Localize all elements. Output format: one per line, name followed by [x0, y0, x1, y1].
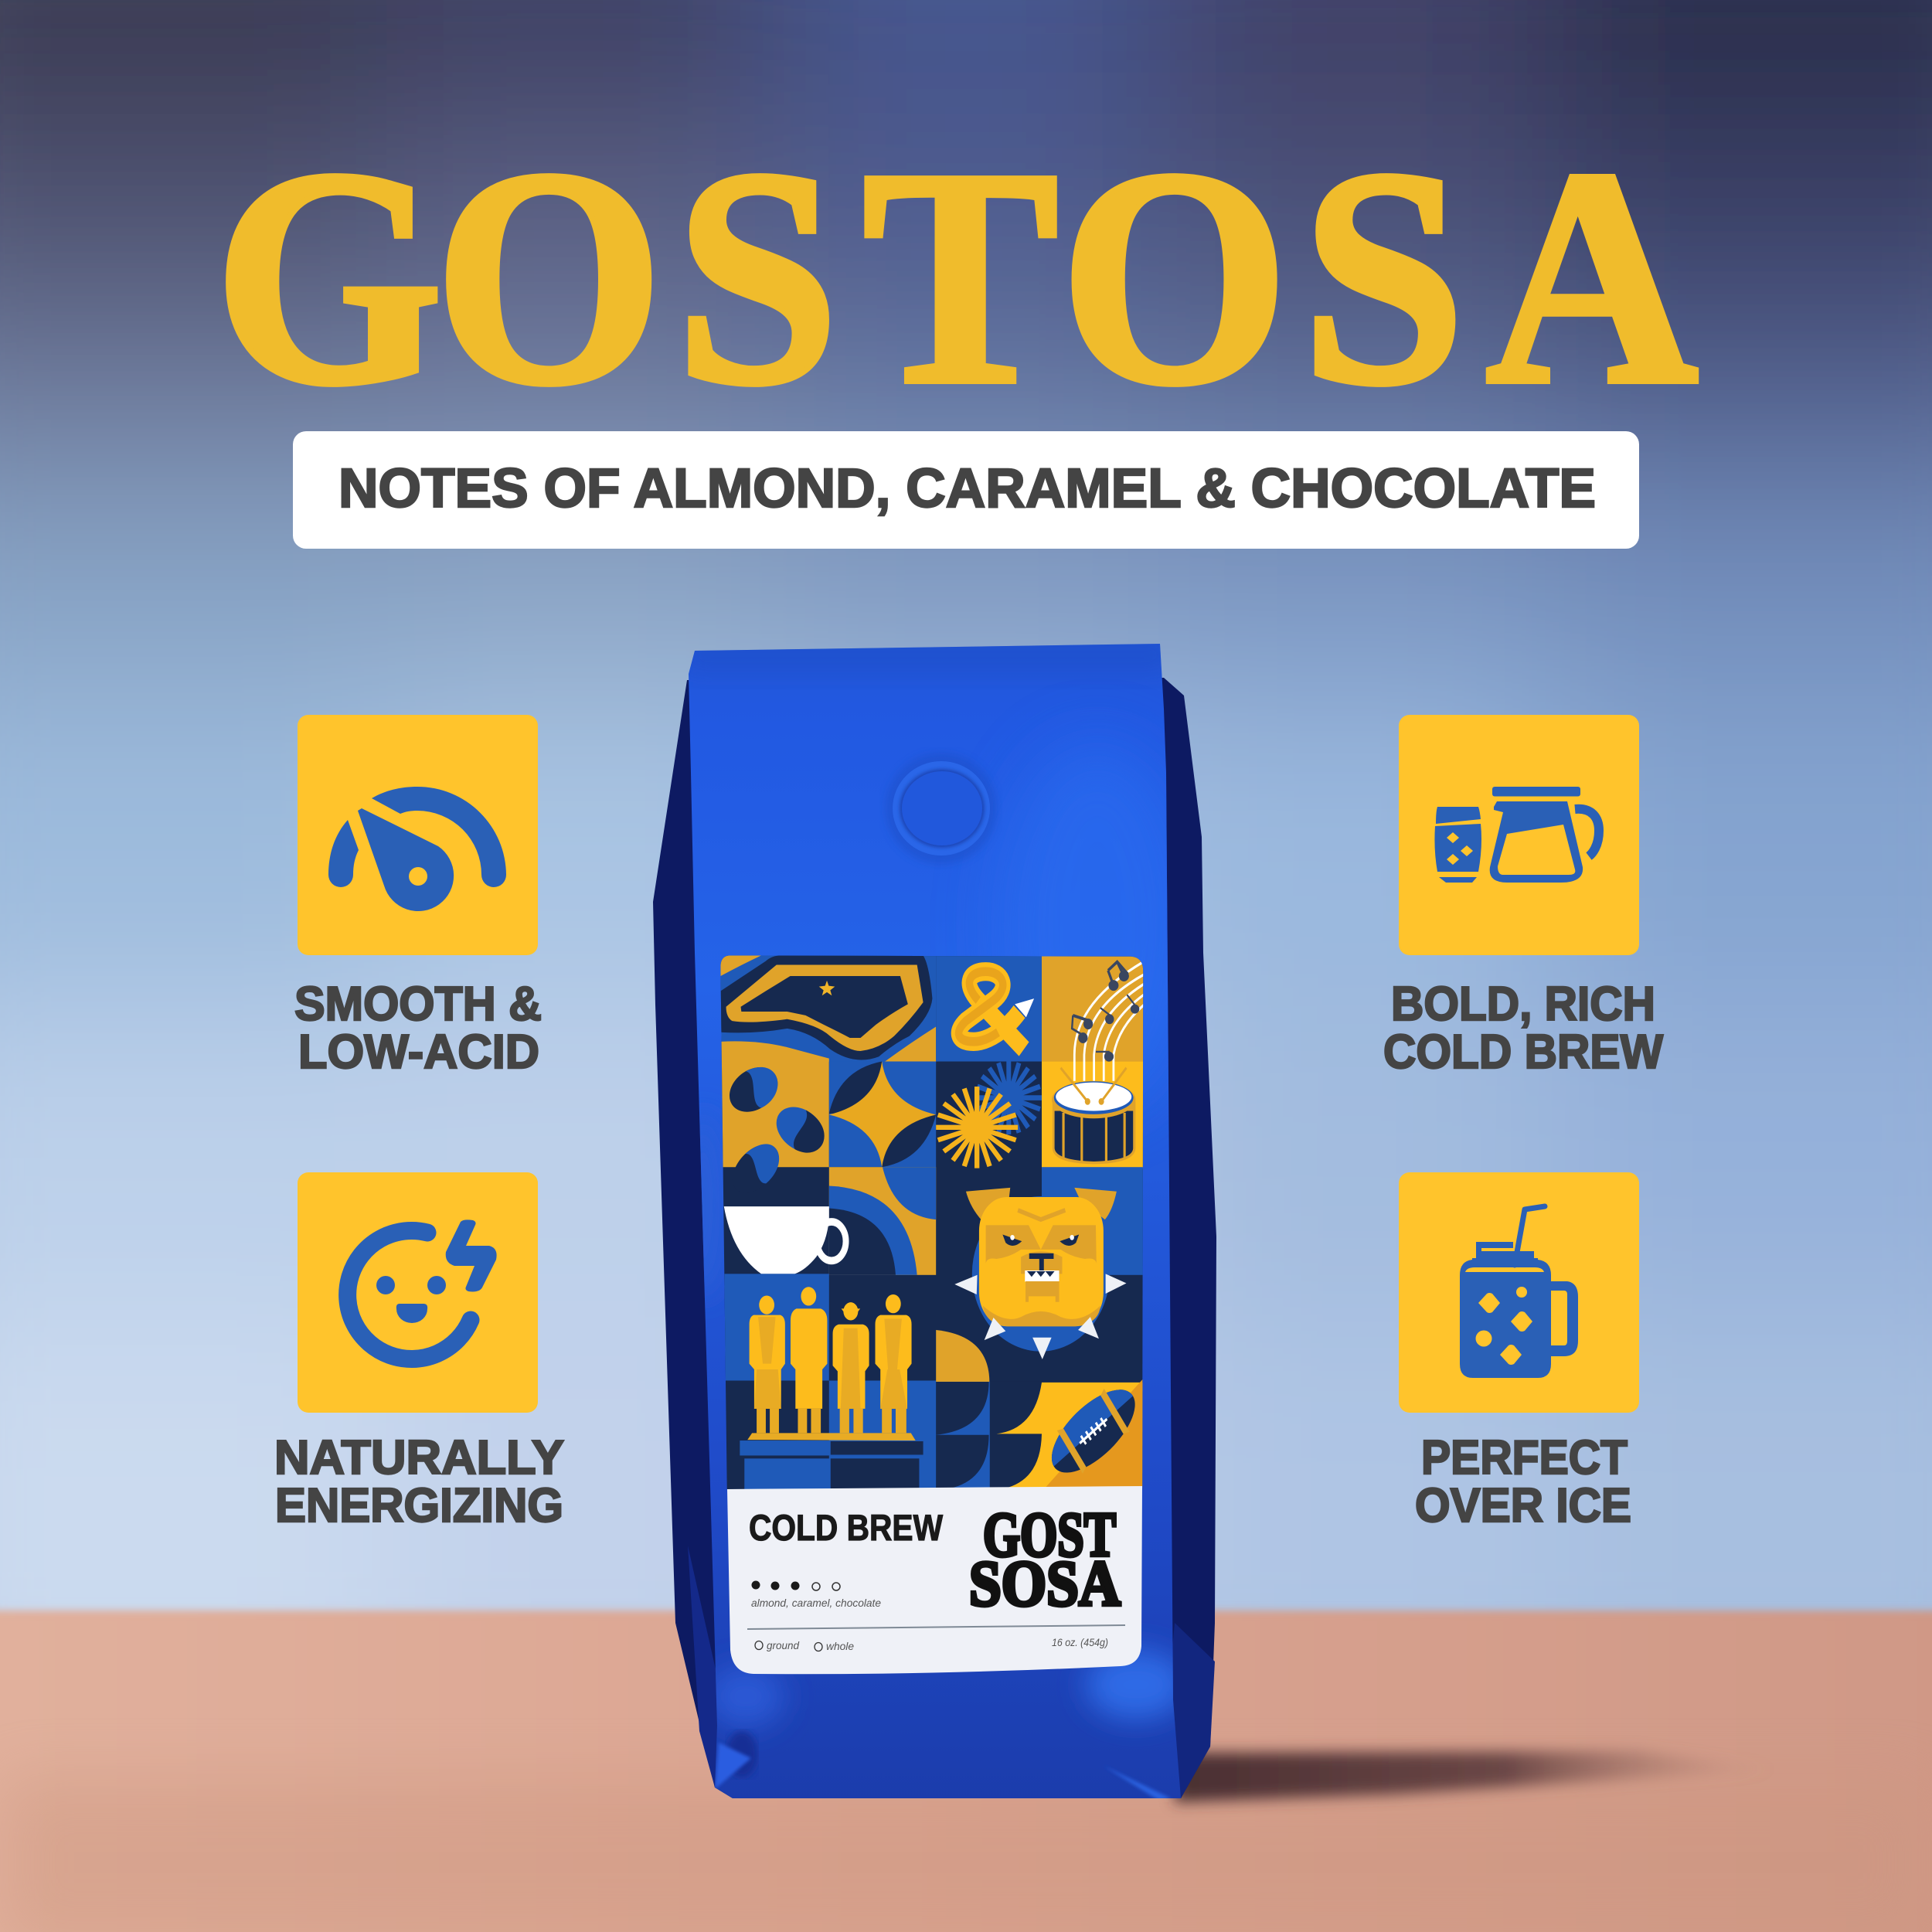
feature: smooth and low-acid [294, 715, 542, 1079]
icon: gauge [328, 787, 506, 911]
label: BOLD, RICH [1391, 978, 1655, 1031]
art: blue right tile [1042, 1167, 1143, 1275]
icon: glass and carafe [1434, 787, 1599, 883]
net weight: 16 oz. (454g) [1052, 1637, 1108, 1648]
art: coffee cup [724, 1206, 846, 1274]
product name: COLD BREW [749, 1507, 944, 1548]
grind options: whole [826, 1641, 854, 1652]
art: pompom tile [936, 1061, 1042, 1168]
brand logo [969, 1499, 1121, 1620]
flavour notes: almond, caramel, chocolate [751, 1597, 881, 1609]
art: music staff and snare drum [1042, 955, 1145, 1168]
label [1383, 978, 1663, 1079]
title: GOSTOSA [214, 106, 1698, 448]
feature: bold rich cold brew [1383, 715, 1663, 1079]
label: NATURALLY [274, 1431, 564, 1485]
tasting notes banner [293, 431, 1639, 549]
label art: mosaic illustration [717, 950, 1148, 1493]
wooden table surface [0, 1611, 1932, 1932]
art: quarter circles [936, 1330, 1043, 1491]
art: football tile [996, 1374, 1146, 1489]
coffee bag [653, 634, 1216, 1808]
label [294, 978, 542, 1079]
label: ENERGIZING [275, 1479, 563, 1532]
feature: naturally energizing [274, 1172, 564, 1532]
label [274, 1431, 564, 1532]
label: OVER ICE [1415, 1479, 1631, 1532]
art: coffee beans tile [720, 1041, 830, 1202]
art: ampersand with pencil [936, 955, 1042, 1062]
art: north carolina map tile [717, 950, 936, 1062]
label: LOW-ACID [298, 1026, 539, 1079]
label: COLD BREW [1383, 1026, 1663, 1079]
bag gussets [653, 678, 1216, 1798]
white info panel [727, 1486, 1142, 1674]
brand logo: GOST [983, 1499, 1116, 1570]
bag shadow on table [1175, 1751, 1777, 1802]
label [1415, 1431, 1631, 1532]
product label [717, 950, 1148, 1674]
bag front panel [672, 634, 1198, 1808]
brand logo: SOSA [969, 1548, 1121, 1620]
feature: perfect over ice [1399, 1172, 1639, 1532]
bag valve [886, 753, 997, 864]
art: arcs tile [829, 1167, 936, 1275]
icon: energized face [348, 1219, 497, 1359]
grind options: ground [767, 1640, 799, 1651]
art: diamond star tile [829, 1062, 936, 1167]
icon: iced mason jar mug [1460, 1206, 1578, 1378]
grind options [755, 1640, 854, 1652]
label: SMOOTH & [294, 978, 542, 1031]
banner text: NOTES OF ALMOND, CARAMEL & CHOCOLATE [338, 458, 1596, 519]
art: statues of four men on plinth [725, 1274, 936, 1491]
roast level dots [751, 1581, 840, 1590]
label: PERFECT [1421, 1431, 1628, 1485]
art: bulldog mascot with spiked collar [954, 1188, 1127, 1359]
